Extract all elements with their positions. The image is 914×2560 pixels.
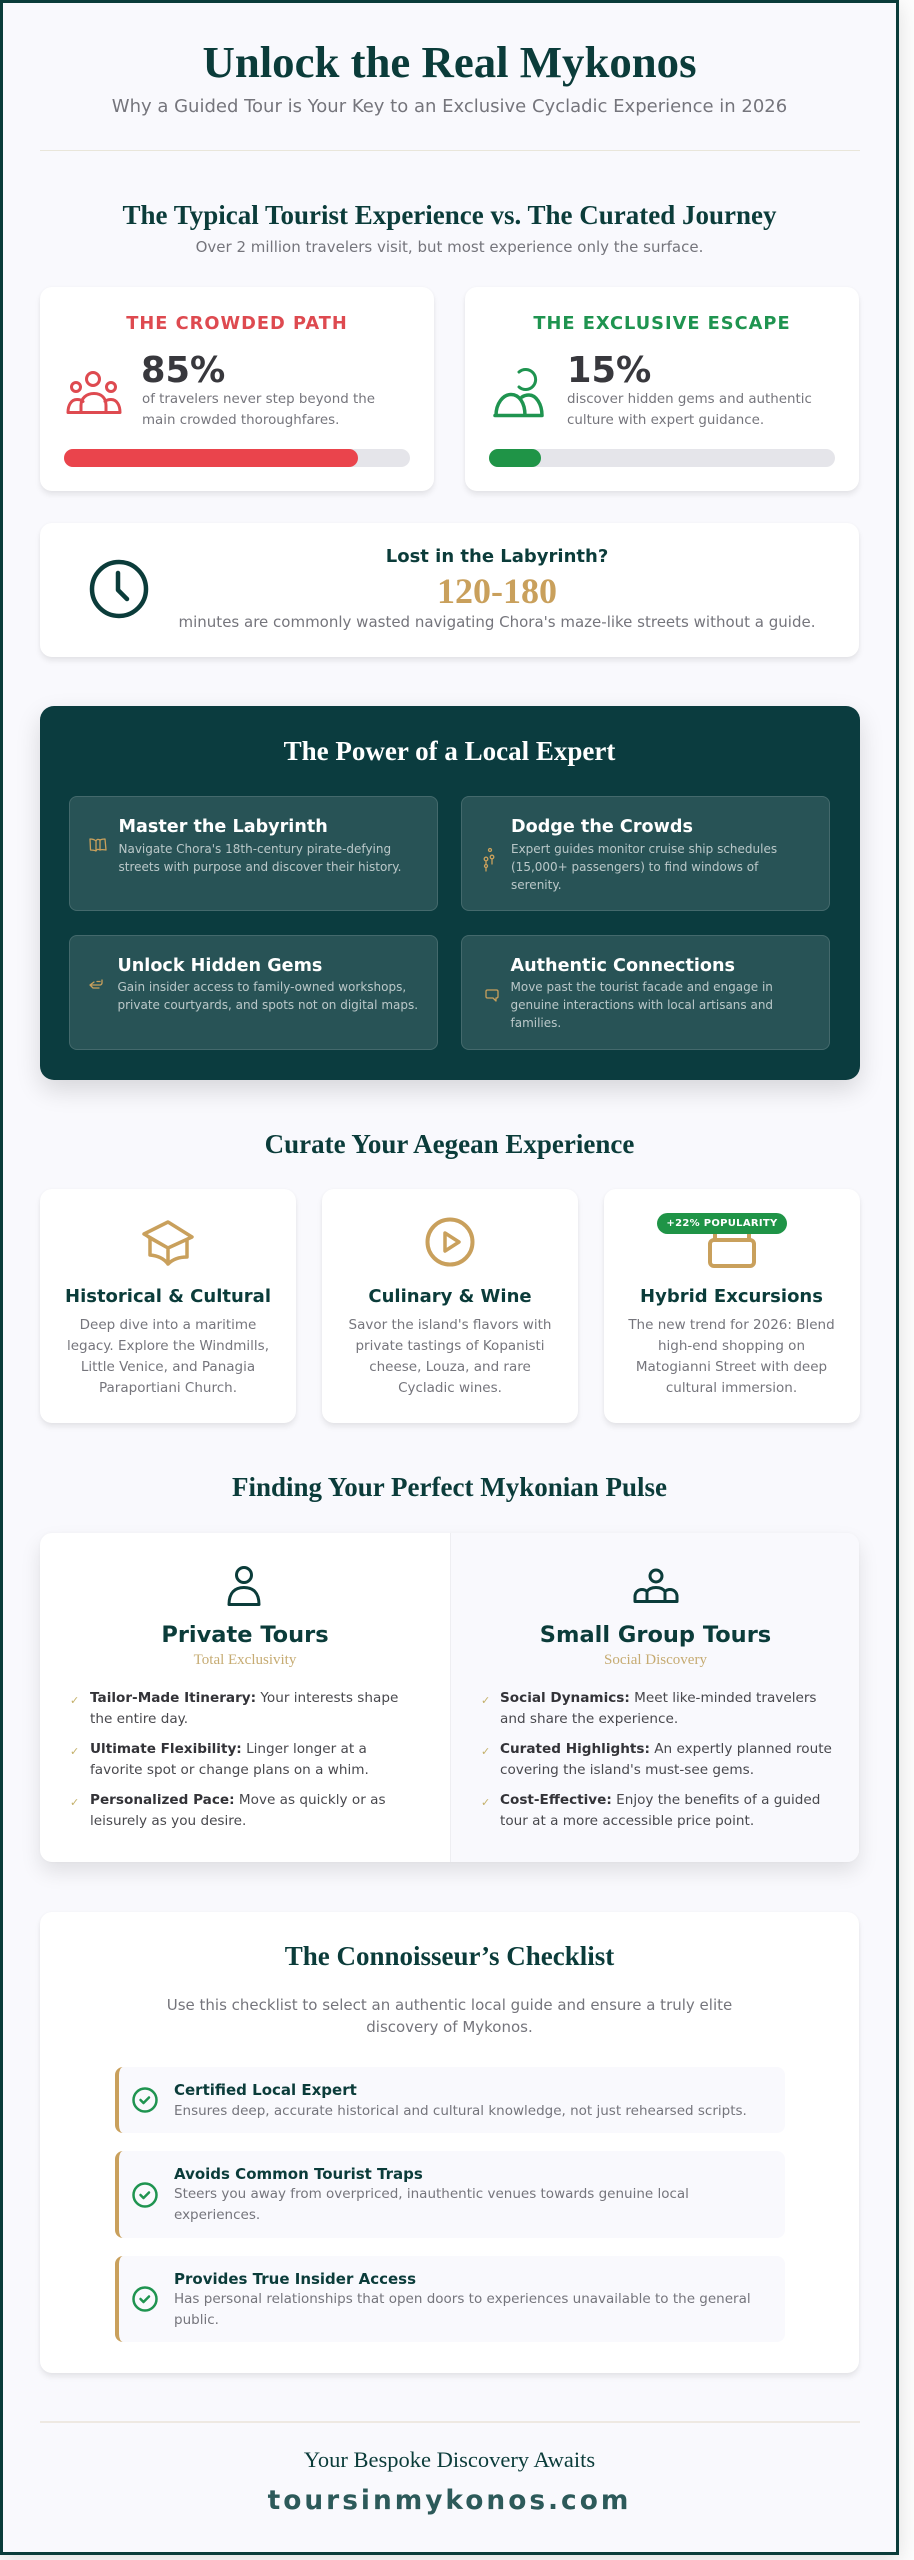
text: historical & cultural: Paraportiani Church. — [99, 1380, 237, 1396]
benefit: curated highlights — [481, 1740, 832, 1778]
benefit: itinerary: Tailor-Made Itinerary: Your interests shape — [90, 1690, 398, 1706]
text: crowded stat description: main crowded thoroughfares. — [142, 413, 339, 428]
card: culinary & wine — [322, 1189, 578, 1423]
progress bar: 15% — [489, 449, 835, 467]
benefit: curated highlights: Curated Highlights: An expertly planned route — [500, 1740, 832, 1756]
checklist item: insider access — [114, 2256, 785, 2342]
list: private tour benefits: ✓ — [70, 1694, 79, 1706]
heading: hybrid excursions: Hybrid Excursions — [640, 1286, 823, 1307]
card: master the labyrinth — [68, 796, 438, 911]
benefit: itinerary — [70, 1690, 398, 1726]
stat: 15%: 15% — [567, 350, 651, 391]
icon: key — [89, 979, 103, 989]
list: small group benefits: ✓ — [481, 1694, 490, 1706]
text: master the labyrinth: Navigate Chora's 18th-century pirate-defying — [118, 842, 391, 856]
text: hybrid excursions: The new trend for 2026: Blend — [628, 1317, 835, 1333]
card: hybrid excursions — [604, 1189, 860, 1423]
icon: map — [89, 838, 107, 852]
card: authentic connections — [460, 935, 830, 1050]
benefit: social dynamics: and share the experience. — [500, 1710, 678, 1726]
benefit: flexibility — [70, 1740, 369, 1778]
text: avoids tourist traps: Steers you away from overpriced, inauthentic venues towards genuine local — [174, 2186, 689, 2202]
icon: crowd of people — [66, 371, 122, 414]
icon: graduation cap — [142, 1220, 194, 1266]
subheading: total exclusivity: Total Exclusivity — [194, 1652, 296, 1668]
text: certified local expert: Ensures deep, accurate historical and cultural knowledge, not just rehearsed scripts. — [174, 2102, 747, 2118]
icon: shopping bag — [708, 1234, 756, 1268]
icon: small group — [634, 1568, 678, 1603]
heading: power of a local expert: The Power of a Local Expert — [284, 736, 615, 766]
text: authentic connections: genuine interactions with local artisans and — [510, 998, 773, 1012]
icon: check circle — [132, 2182, 158, 2208]
footer tagline: Your Bespoke Discovery Awaits — [304, 2447, 595, 2472]
list: private tour benefits: ✓ — [70, 1796, 79, 1808]
heading: crowded path: THE CROWDED PATH — [126, 312, 348, 334]
text: insider access: public. — [174, 2312, 219, 2328]
benefit: pace: Personalized Pace: Move as quickly or as — [90, 1792, 386, 1808]
text: checklist intro — [167, 1996, 732, 2036]
panel: lost in the labyrinth — [40, 523, 859, 657]
text: historical & cultural: Little Venice, and Panagia — [81, 1359, 255, 1375]
icon: check circle — [132, 2286, 158, 2312]
list: small group benefits — [481, 1690, 832, 1828]
text: dodge the crowds: serenity. — [511, 878, 562, 892]
heading: exclusive escape: THE EXCLUSIVE ESCAPE — [533, 312, 791, 334]
text: hybrid excursions: Matogianni Street with deep — [636, 1359, 827, 1375]
panel: tour comparison — [40, 1533, 859, 1862]
text: exclusive stat description: culture with expert guidance. — [567, 413, 764, 428]
text: insider access: Has personal relationships that open doors to experiences unavailable to the general — [174, 2290, 751, 2306]
text: avoids tourist traps — [174, 2186, 689, 2222]
benefit: social dynamics: Social Dynamics: Meet like-minded travelers — [500, 1690, 817, 1706]
icon: check circle — [132, 2087, 158, 2113]
text: historical & cultural — [67, 1317, 269, 1396]
text: hybrid excursions — [628, 1317, 835, 1396]
benefit: pace: leisurely as you desire. — [90, 1812, 246, 1828]
icon: location pins — [484, 848, 494, 872]
text: exclusive stat description: discover hidden gems and authentic — [567, 392, 812, 407]
list: private tour benefits — [70, 1690, 398, 1828]
icon: couple of people — [493, 368, 544, 418]
text: labyrinth description: minutes are commonly wasted navigating Chora's maze-like streets without a guide. — [179, 613, 815, 631]
text: avoids tourist traps: experiences. — [174, 2206, 260, 2222]
benefit: itinerary: the entire day. — [90, 1710, 188, 1726]
checklist item: certified local expert — [114, 2067, 785, 2133]
heading: small group tours: Small Group Tours — [540, 1622, 771, 1648]
benefit: pace — [70, 1792, 386, 1828]
panel: the exclusive escape — [465, 287, 859, 491]
text: dodge the crowds: Expert guides monitor cruise ship schedules — [511, 842, 777, 856]
progress bar: 85% — [64, 449, 410, 467]
heading: unlock hidden gems: Unlock Hidden Gems — [118, 956, 322, 976]
heading: finding your perfect mykonian pulse: Finding Your Perfect Mykonian Pulse — [232, 1472, 667, 1502]
text: unlock hidden gems — [118, 980, 418, 1012]
subheading: visitors: Over 2 million travelers visit, but most experience only the surface. — [196, 238, 703, 256]
stat: 85%: 85% — [141, 350, 225, 391]
list: small group benefits: ✓ — [481, 1796, 490, 1808]
text: crowded stat description — [142, 392, 375, 428]
text: hybrid excursions: high-end shopping on — [658, 1338, 805, 1354]
benefit: cost effective — [481, 1792, 820, 1828]
subheading: social discovery: Social Discovery — [604, 1652, 707, 1668]
text: authentic connections: Move past the tourist facade and engage in — [510, 980, 773, 994]
badge: +22% popularity — [657, 1213, 787, 1234]
heading: master the labyrinth: Master the Labyrinth — [118, 817, 328, 837]
benefit: cost effective: tour at a more accessible price point. — [500, 1812, 754, 1828]
text: authentic connections — [510, 980, 773, 1030]
text: culinary & wine: private tastings of Kopanisti — [355, 1338, 545, 1354]
column: small group tours — [450, 1533, 859, 1862]
text: dodge the crowds: (15,000+ passengers) to find windows of — [511, 860, 758, 874]
heading: dodge the crowds: Dodge the Crowds — [511, 817, 693, 837]
panel: the connoisseur's checklist — [40, 1912, 859, 2373]
heading: connoisseur's checklist: The Connoisseur’s Checklist — [285, 1941, 614, 1971]
heading: certified local expert: Certified Local Expert — [174, 2081, 357, 2099]
text: authentic connections: families. — [510, 1016, 561, 1030]
text: exclusive stat description — [567, 392, 812, 428]
text: master the labyrinth — [118, 842, 401, 874]
benefit: cost effective: Cost-Effective: Enjoy the benefits of a guided — [500, 1792, 820, 1808]
benefit: flexibility: favorite spot or change plans on a whim. — [90, 1762, 369, 1778]
text: unlock hidden gems: Gain insider access to family-owned workshops, — [118, 980, 406, 994]
column: private tours — [70, 1566, 398, 1828]
checklist item: avoids tourist traps — [114, 2151, 785, 2238]
benefit: social dynamics — [481, 1690, 817, 1726]
icon: play circle — [426, 1218, 474, 1266]
text: insider access — [174, 2290, 751, 2328]
benefit: flexibility: Ultimate Flexibility: Linger longer at a — [90, 1740, 367, 1756]
card: dodge the crowds — [460, 796, 830, 911]
stat: 120-180 minutes: 120-180 — [437, 571, 557, 611]
text: culinary & wine: cheese, Louza, and rare — [369, 1359, 531, 1375]
text: unlock hidden gems: private courtyards, and spots not on digital maps. — [118, 998, 418, 1012]
title: Unlock the Real Mykonos — [202, 37, 697, 87]
list: private tour benefits: ✓ — [70, 1744, 79, 1758]
benefit: curated highlights: covering the island's must-see gems. — [500, 1762, 754, 1778]
icon: clock — [90, 560, 148, 618]
text: dodge the crowds — [511, 842, 777, 892]
heading: historical & cultural: Historical & Cultural — [65, 1286, 271, 1307]
subtitle: Why a Guided Tour is Your Key to an Exclusive Cycladic Experience in 2026 — [112, 96, 787, 117]
icon: speech bubble — [485, 989, 499, 1002]
card: historical & cultural — [40, 1189, 296, 1423]
heading: typical vs curated: The Typical Tourist Experience vs. The Curated Journey — [122, 200, 777, 230]
text: hybrid excursions: cultural immersion. — [666, 1380, 797, 1396]
footer website: toursinmykonos.com — [268, 2485, 631, 2516]
heading: lost in the labyrinth: Lost in the Labyrinth? — [386, 546, 608, 567]
text: culinary & wine: Savor the island's flavors with — [349, 1317, 551, 1333]
text: crowded stat description: of travelers never step beyond the — [142, 392, 375, 407]
text: culinary & wine — [349, 1317, 551, 1396]
badge: +22% popularity: +22% POPULARITY — [666, 1218, 778, 1229]
panel: the crowded path — [40, 287, 434, 491]
list: small group benefits: ✓ — [481, 1744, 490, 1758]
panel: the power of a local expert — [40, 706, 860, 1080]
heading: authentic connections: Authentic Connections — [510, 956, 735, 976]
text: historical & cultural: legacy. Explore the Windmills, — [67, 1338, 269, 1354]
heading: private tours: Private Tours — [161, 1622, 329, 1648]
text: checklist intro: discovery of Mykonos. — [366, 2018, 533, 2036]
heading: insider access: Provides True Insider Access — [174, 2270, 416, 2288]
card: unlock hidden gems — [68, 935, 438, 1050]
text: culinary & wine: Cycladic wines. — [398, 1380, 502, 1396]
text: master the labyrinth: streets with purpose and discover their history. — [118, 860, 401, 874]
icon: single person — [228, 1566, 260, 1606]
heading: avoids tourist traps: Avoids Common Tourist Traps — [174, 2164, 423, 2182]
text: checklist intro: Use this checklist to select an authentic local guide and ensure a truly elite — [167, 1996, 732, 2014]
text: historical & cultural: Deep dive into a maritime — [80, 1317, 256, 1333]
heading: culinary & wine: Culinary & Wine — [368, 1286, 532, 1307]
heading: curate your aegean experience: Curate Your Aegean Experience — [265, 1129, 634, 1159]
